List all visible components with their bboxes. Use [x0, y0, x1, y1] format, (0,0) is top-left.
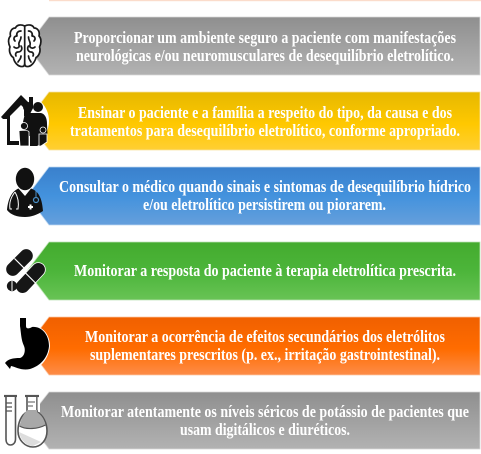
text: consultar o médico: e/ou eletrolítico persistirem ou piorarem. — [143, 195, 386, 214]
panel: ensinar o paciente — [0, 92, 480, 150]
icon: test tube and flask — [0, 392, 47, 449]
icon: brain — [9, 25, 41, 67]
text: efeitos secundários — [85, 327, 445, 364]
icon: doctor — [7, 168, 43, 217]
icon: stomach — [3, 316, 50, 372]
icon: pills — [3, 246, 48, 296]
text: consultar o médico — [59, 177, 471, 214]
text: monitorar potássio — [61, 402, 469, 439]
panel: ambiente seguro — [9, 17, 480, 75]
text: ensinar o paciente — [70, 103, 460, 140]
icon: family and house — [0, 94, 49, 148]
panel: monitorar potássio — [0, 392, 480, 449]
top edge of cropped panel — [49, 0, 481, 1]
panel: monitorar a resposta — [3, 242, 480, 300]
text: monitorar potássio: usam digitálicos e diuréticos. — [180, 420, 350, 439]
text: ambiente seguro — [74, 28, 456, 65]
panel: monitorar efeitos secundários — [3, 316, 480, 375]
panel: consultar o médico — [7, 167, 480, 225]
